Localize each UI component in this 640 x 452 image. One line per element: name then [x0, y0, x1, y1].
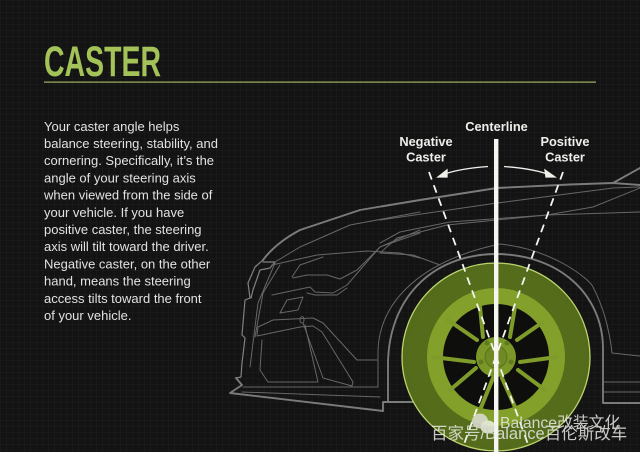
watermark	[431, 414, 627, 443]
body text: Negative caster, on the other	[44, 256, 211, 271]
arrow: positive caster	[504, 166, 555, 177]
body text: balance steering, stability, and	[44, 136, 218, 151]
car body thin lines	[242, 187, 640, 397]
rim	[435, 296, 557, 418]
watermark: Balance改装文化	[500, 414, 620, 432]
title: CASTER	[44, 38, 161, 86]
car body heavy lines	[230, 168, 640, 411]
body text: cornering. Specifically, it’s the	[44, 153, 214, 168]
car outline	[230, 168, 640, 411]
body text: hand, means the steering	[44, 274, 191, 289]
labels: Negative	[399, 134, 453, 149]
spokes	[433, 307, 557, 410]
labels: Positive	[540, 134, 590, 149]
dashed caster axes	[429, 172, 563, 447]
arrow: negative caster	[438, 166, 488, 177]
body text: angle of your steering axis	[44, 170, 196, 185]
arrows	[438, 166, 555, 177]
body text: when viewed from the side of	[43, 188, 213, 203]
labels: Caster	[406, 150, 446, 164]
watermark: 百家号/Balance百伦斯改车	[431, 424, 627, 443]
body text: access tilts toward the front	[44, 291, 202, 306]
body text: Your caster angle helps	[44, 119, 180, 134]
labels	[399, 119, 590, 164]
labels: Centerline	[465, 119, 528, 134]
headlight and bumper outline	[236, 260, 275, 378]
body text	[43, 119, 218, 323]
body text: of your vehicle.	[44, 308, 131, 323]
labels: Caster	[545, 150, 585, 164]
icon: chat bubbles	[472, 414, 496, 434]
hub	[476, 337, 516, 377]
centerline	[494, 139, 498, 452]
body text: positive caster, the steering	[44, 222, 202, 237]
body text: axis will tilt toward the driver.	[44, 239, 209, 254]
tire	[402, 263, 590, 451]
body text: your vehicle. If you have	[44, 205, 184, 220]
wheel	[402, 263, 590, 451]
